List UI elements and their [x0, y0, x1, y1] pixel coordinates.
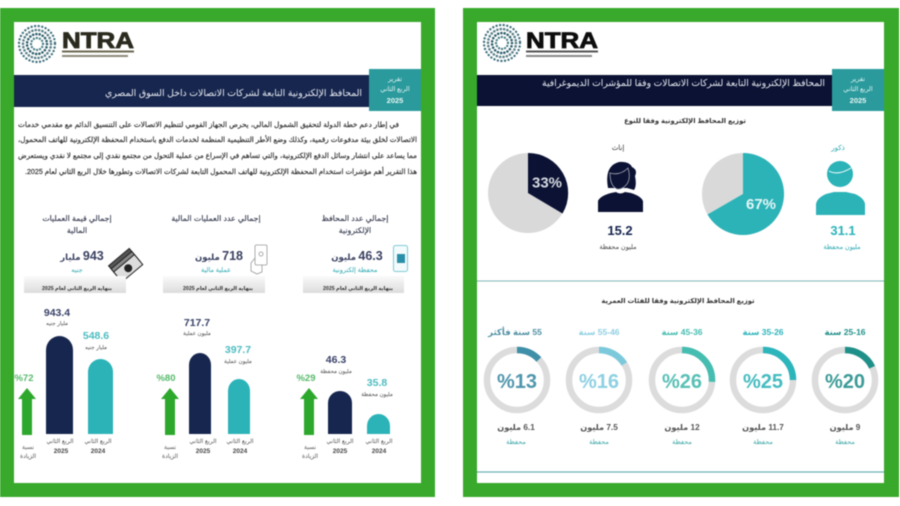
heading: by gender: توزيع المحافظ الإلكترونية وفقا للنوع: [624, 117, 746, 125]
kpi: 46.3 million: 46.3 مليون: [331, 249, 383, 263]
age group: 36-45: 12 مليون: [664, 423, 700, 433]
column: total value of transactions: [14, 214, 143, 460]
column: total number of transactions: [156, 214, 267, 460]
heading: [322, 214, 388, 235]
heading: by age group: توزيع المحافظ الإلكترونية وفقا للفئات العمرية: [601, 297, 755, 305]
donut: 16%: %16: [579, 371, 619, 393]
value: 15.2: [607, 223, 633, 238]
report badge: الربع الثاني: [380, 86, 410, 93]
bar chart: مليون محفظة: [320, 369, 352, 375]
arrow: 80% increase: %80: [156, 373, 176, 384]
logo: NTRA: [484, 25, 598, 61]
heading: الإلكترونية: [339, 226, 371, 235]
report badge: 2025: [850, 96, 866, 105]
bar chart: مليون عملية: [224, 359, 252, 365]
period band: بنهاية الربع الثاني لعام 2025: [323, 286, 393, 292]
bar chart: الربع الثاني: [46, 438, 74, 445]
period band: [24, 276, 126, 293]
bar chart: 35.8: [367, 377, 387, 389]
bar chart: مليار جنيه: [46, 321, 68, 327]
bar chart: 2025: [54, 448, 69, 455]
heading: إجمالي عدد المحافظ: [322, 214, 388, 223]
report badge: [832, 69, 884, 111]
age group: 46-55: [569, 327, 629, 446]
arrow: 72% increase: نسبة: [22, 445, 34, 451]
donut: 25%: %25: [743, 371, 783, 393]
donut: 20%: %20: [825, 371, 865, 393]
arrow: 80% increase: [156, 373, 179, 460]
bar chart: الربع الثاني: [189, 438, 217, 445]
bar chart: 46.3: [326, 354, 346, 366]
arrow: 29% increase: %29: [296, 373, 316, 384]
arrow: 72% increase: %72: [14, 373, 34, 384]
value: [823, 223, 861, 251]
arrow: 29% increase: [296, 373, 318, 460]
bar chart: [183, 317, 254, 455]
arrow: 80% increase: نسبة: [164, 445, 176, 451]
age group: 46-55: محفظة: [589, 439, 609, 446]
intro text: مما يساعد على انتشار وسائل الدفع الإلكترونية، والتي تساهم في الإسراع من عملية التحول من مجتمع نقدي إلى مجتمع لا نقدي ويستعرض: [18, 151, 417, 160]
bar chart: 2024: [91, 448, 106, 455]
arrow: 80% increase: الزيادة: [162, 453, 178, 460]
report badge: الربع الثاني: [843, 86, 873, 93]
arrow: 72% increase: الزيادة: [20, 453, 36, 460]
pie chart: 67%: [702, 153, 784, 235]
bar chart: 943.4: [44, 307, 70, 319]
icon: man: [816, 161, 865, 215]
age group: 26-35: 11.7 مليون: [742, 423, 784, 433]
bar chart: 2025: [196, 448, 211, 455]
kpi: 718 million: عملية مالية: [201, 267, 231, 274]
icon: phone in hand: [251, 245, 267, 274]
kpi: 718 million: 718 مليون: [195, 249, 243, 263]
age group: 16-25: 25-16 سنة: [824, 327, 866, 337]
age group: 26-35: 35-26 سنة: [742, 327, 784, 337]
bar chart: الربع الثاني: [226, 438, 254, 445]
value: 31.1: [830, 223, 856, 238]
heading: [42, 214, 112, 235]
bar chart: 548.6: [83, 330, 109, 342]
report badge: تقرير: [850, 76, 865, 83]
donut: 13%: %13: [497, 371, 537, 393]
arrow: 72% increase: [14, 373, 36, 460]
bar chart: 717.7: [184, 317, 210, 329]
age group: 26-35: [733, 327, 793, 446]
title bar: [477, 75, 832, 106]
logo: NTRA: [19, 26, 134, 62]
kpi: 46.3 million: محفظة إلكترونية: [333, 267, 377, 274]
pie chart: 33%: 33%: [532, 174, 562, 192]
label: إناث: [612, 145, 624, 152]
age group: 46-55: 7.5 مليون: [580, 423, 618, 433]
bar chart: مليون عملية: [183, 331, 211, 337]
heading: المالية: [67, 226, 87, 235]
intro text: في إطار دعم خطة الدولة لتحقيق الشمول المالي، يحرص الجهاز القومي لتنظيم الاتصالات على التنسيق الدائم مع مقدمي خدمات: [18, 120, 399, 129]
age group: 46-55: 55-46 سنة: [578, 327, 620, 337]
donut: 26%: %26: [662, 371, 702, 393]
age group: 55 and over: 6.1 مليون: [497, 423, 535, 433]
value: مليون محفظة: [823, 244, 861, 251]
title bar: المحافظ الإلكترونية التابعة لشركات الاتصالات وفقا للمؤشرات الديموغرافية: [542, 78, 825, 89]
logo: NTRA: NTRA: [62, 28, 134, 53]
report badge: [369, 69, 421, 111]
bar chart: الربع الثاني: [326, 438, 354, 445]
icon: woman: [598, 162, 643, 212]
period band: [303, 276, 404, 293]
intro text: الاتصالات لخلق بيئة مدفوعات رقمية، وكذلك وضع الأطر التنظيمية المنظمة لخدمات الدفع باستخدام المحفظة الإلكترونية للهاتف المحمول،: [18, 135, 417, 144]
logo: NTRA: NTRA: [526, 28, 598, 53]
bar chart: [320, 354, 393, 455]
bar chart: 397.7: [225, 344, 251, 356]
age group: 55 and over: 55 سنة فأكثر: [487, 326, 542, 338]
value: [599, 223, 637, 251]
kpi: 943 billion: جنيه: [71, 267, 83, 274]
bar chart: الربع الثاني: [365, 438, 393, 445]
bar chart: مليار جنيه: [85, 345, 107, 351]
pie chart: 33%: [488, 153, 568, 233]
age group: 36-45: محفظة: [672, 439, 692, 446]
arrow: 29% increase: نسبة: [304, 445, 316, 451]
age group: 16-25: 9 مليون: [830, 423, 861, 433]
heading: إجمالي عدد العمليات المالية: [171, 214, 261, 223]
value: مليون محفظة: [599, 244, 637, 251]
kpi: 943 billion: 943 مليار: [59, 249, 104, 263]
age group: 36-45: [652, 327, 712, 446]
icon: wallet phone: [394, 246, 408, 272]
female group: [488, 145, 643, 251]
age group: 55 and over: محفظة: [506, 439, 526, 446]
age group: 16-25: محفظة: [835, 439, 855, 446]
report badge: 2025: [387, 96, 403, 105]
bar chart: [44, 307, 113, 455]
bar chart: 2025: [333, 448, 348, 455]
column: total number of wallets: [296, 214, 408, 460]
arrow: 29% increase: الزيادة: [302, 453, 318, 460]
heading: إجمالي قيمة العمليات: [42, 214, 112, 223]
bar chart: الربع الثاني: [84, 438, 112, 445]
bar chart: 2024: [372, 448, 387, 455]
kpi: 46.3 million: [331, 249, 383, 274]
pie chart: 67%: 67%: [746, 196, 776, 213]
panel: wallets in the Egyptian market: [0, 8, 435, 497]
age group: 36-45: 45-36 سنة: [661, 327, 703, 337]
panel: wallets by demographics: [463, 8, 899, 497]
title bar: المحافظ الإلكترونية التابعة لشركات الاتصالات داخل السوق المصري: [105, 88, 362, 99]
label: ذكور: [830, 144, 845, 152]
icon: money: [109, 248, 143, 282]
intro text: هذا التقرير أهم مؤشرات استخدام المحفظة الإلكترونية للهاتف المحمول التابعة لشركات الاتصالات وتطورها خلال الربع الثاني لعام 2025.: [25, 166, 417, 176]
kpi: 718 million: [195, 249, 243, 274]
intro text: [18, 120, 417, 176]
age group: 26-35: محفظة: [753, 439, 773, 446]
period band: [163, 276, 265, 293]
kpi: 943 billion: [59, 249, 104, 274]
bar chart: مليون محفظة: [361, 392, 393, 398]
age group: 16-25: [815, 327, 875, 446]
male group: [702, 144, 865, 251]
age group: 55 and over: [487, 326, 547, 446]
period band: بنهاية الربع الثاني لعام 2025: [42, 286, 112, 292]
bar chart: 2024: [233, 448, 248, 455]
period band: بنهاية الربع الثاني لعام 2025: [183, 286, 253, 292]
title bar: [14, 75, 369, 107]
report badge: تقرير: [387, 76, 402, 83]
